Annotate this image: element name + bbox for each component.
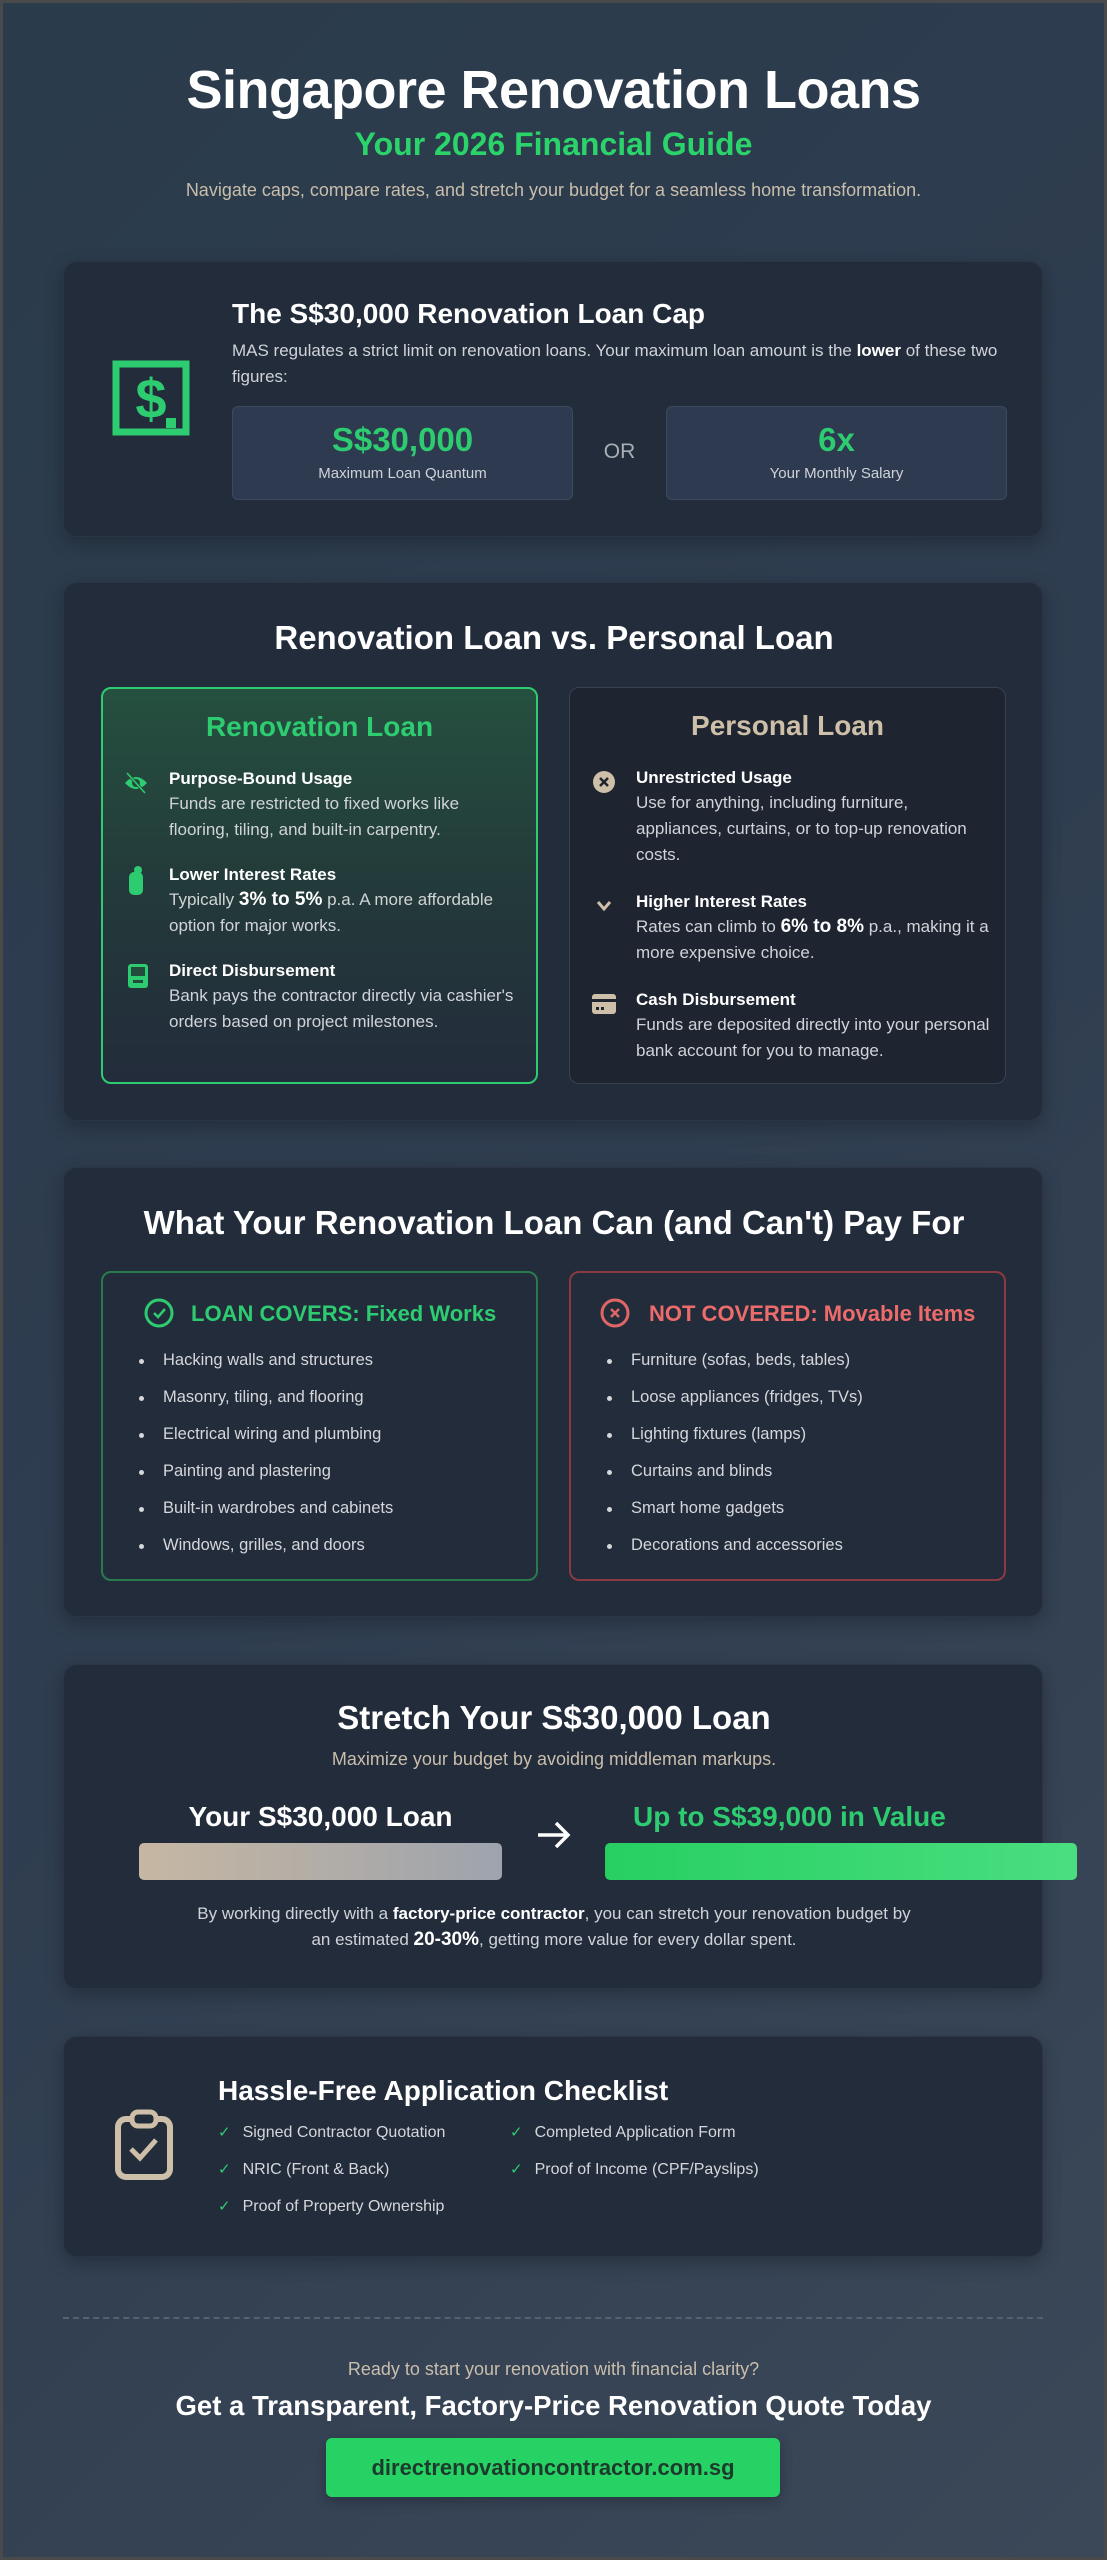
sub-panel: covers: Built-in wardrobes and cabinets: [163, 1499, 393, 1517]
sub-panel: covers: Electrical wiring and plumbing: [163, 1425, 381, 1443]
item: cash disbursement: Funds are deposited directly into your personal bank account for you to manage.: [636, 1015, 989, 1060]
sub-panel: covers: Painting and plastering: [163, 1462, 331, 1480]
explanation text: By working directly with a factory-price contractor, you can stretch your renovation budget by an estimated 20-30%, getting more value for every dollar spent.: [197, 1904, 911, 1950]
sub-panel: not covered: Furniture (sofas, beds, tables): [631, 1351, 850, 1369]
heading: Stretch Your S$30,000 Loan: [337, 1699, 771, 1736]
item: unrestricted: Use for anything, including furniture, appliances, curtains, or to top-up renovation costs.: [636, 793, 967, 864]
sub-panel: not covered: NOT COVERED: Movable Items: [649, 1301, 975, 1326]
subheading: Maximize your budget by avoiding middleman markups.: [332, 1749, 776, 1769]
title: Singapore Renovation Loans: [186, 60, 921, 120]
box: max quantum: [232, 406, 573, 500]
sub-panel: covers: [101, 1271, 538, 1581]
heading: Hassle-Free Application Checklist: [218, 2075, 668, 2106]
item: purpose-bound: Funds are restricted to fixed works like flooring, tiling, and built-in carpentry.: [169, 794, 459, 839]
box: max quantum: Maximum Loan Quantum: [318, 465, 487, 482]
icon: clipboard: [115, 2110, 173, 2180]
icon: check circle: [144, 1298, 174, 1328]
panel: stretch loan: [63, 1664, 1043, 1989]
sub-panel: not covered: Curtains and blinds: [631, 1462, 772, 1480]
bar: value: Up to S$39,000 in Value: [633, 1801, 946, 1832]
item: purpose-bound: Purpose-Bound Usage: [169, 769, 352, 788]
heading: Renovation Loan vs. Personal Loan: [274, 619, 834, 656]
item: unrestricted: [593, 768, 967, 864]
heading: What Your Renovation Loan Can (and Can't) Pay For: [144, 1204, 964, 1241]
sub-panel: renovation loan: [101, 687, 538, 1084]
checklist items: ✓ Signed Contractor Quotation: [218, 2124, 445, 2141]
sub-panel: covers: Hacking walls and structures: [163, 1351, 373, 1369]
item: direct disbursement: Direct Disbursement: [169, 961, 335, 980]
item: higher rates: Higher Interest Rates: [636, 892, 807, 911]
box: salary: [666, 406, 1007, 500]
sub-panel: not covered: Decorations and accessories: [631, 1536, 843, 1554]
checklist items: ✓ NRIC (Front & Back): [218, 2161, 389, 2178]
sub-panel: not covered: [569, 1271, 1006, 1581]
panel: checklist: [63, 2036, 1043, 2257]
sub-panel: not covered: Lighting fixtures (lamps): [631, 1425, 806, 1443]
panel: coverage: [63, 1167, 1043, 1617]
icon: dollar: [112, 360, 190, 436]
box: salary: 6x: [818, 421, 855, 458]
panel: loan cap: [63, 261, 1043, 537]
box: salary: Your Monthly Salary: [770, 465, 903, 482]
CTA button: directrenovationcontractor.com.sg: [371, 2455, 735, 2480]
bar: your loan: Your S$30,000 Loan: [188, 1801, 453, 1832]
CTA button: [326, 2438, 780, 2497]
sub-panel: personal loan: Personal Loan: [691, 710, 884, 741]
icon: dollar: $: [135, 367, 167, 430]
bar: value: [605, 1801, 1077, 1880]
item: direct disbursement: [128, 961, 513, 1031]
sub-panel: personal loan: [569, 687, 1006, 1084]
checklist items: ✓ Proof of Property Ownership: [218, 2198, 444, 2215]
icon: x circle: [600, 1298, 630, 1328]
checklist items: ✓ Proof of Income (CPF/Payslips): [510, 2161, 759, 2178]
item: higher rates: Rates can climb to 6% to 8% p.a., making it a more expensive choice.: [636, 916, 989, 962]
box: max quantum: S$30,000: [332, 421, 473, 458]
item: lower rates: Typically 3% to 5% p.a. A more affordable option for major works.: [169, 889, 493, 935]
description: MAS regulates a strict limit on renovation loans. Your maximum loan amount is the lower of these two figures:: [232, 341, 997, 386]
panel: loan comparison: [63, 582, 1043, 1121]
item: higher rates: [597, 892, 989, 962]
checklist items: [218, 2124, 759, 2215]
item: cash disbursement: [592, 990, 989, 1060]
item: direct disbursement: Bank pays the contractor directly via cashier's orders based on project milestones.: [169, 986, 513, 1031]
sub-panel: not covered: Smart home gadgets: [631, 1499, 784, 1517]
item: lower rates: [129, 865, 493, 935]
CTA prompt: Ready to start your renovation with financial clarity?: [348, 2359, 759, 2379]
tagline: Navigate caps, compare rates, and stretch your budget for a seamless home transformation.: [186, 180, 921, 200]
sub-panel: covers: LOAN COVERS: Fixed Works: [191, 1301, 496, 1326]
checklist items: ✓ Completed Application Form: [510, 2124, 736, 2141]
CTA heading: Get a Transparent, Factory-Price Renovation Quote Today: [176, 2390, 931, 2421]
sub-panel: covers: Masonry, tiling, and flooring: [163, 1388, 364, 1406]
sub-panel: renovation loan: Renovation Loan: [206, 711, 433, 742]
item: lower rates: Lower Interest Rates: [169, 865, 336, 884]
item: unrestricted: Unrestricted Usage: [636, 768, 792, 787]
heading: The S$30,000 Renovation Loan Cap: [232, 298, 705, 329]
bar: your loan: [139, 1801, 502, 1880]
subtitle: Your 2026 Financial Guide: [355, 126, 752, 162]
OR: OR: [604, 440, 635, 463]
sub-panel: covers: Windows, grilles, and doors: [163, 1536, 365, 1554]
item: purpose-bound: [125, 769, 459, 839]
sub-panel: not covered: Loose appliances (fridges, TVs): [631, 1388, 863, 1406]
arrow: [538, 1822, 570, 1848]
item: cash disbursement: Cash Disbursement: [636, 990, 796, 1009]
